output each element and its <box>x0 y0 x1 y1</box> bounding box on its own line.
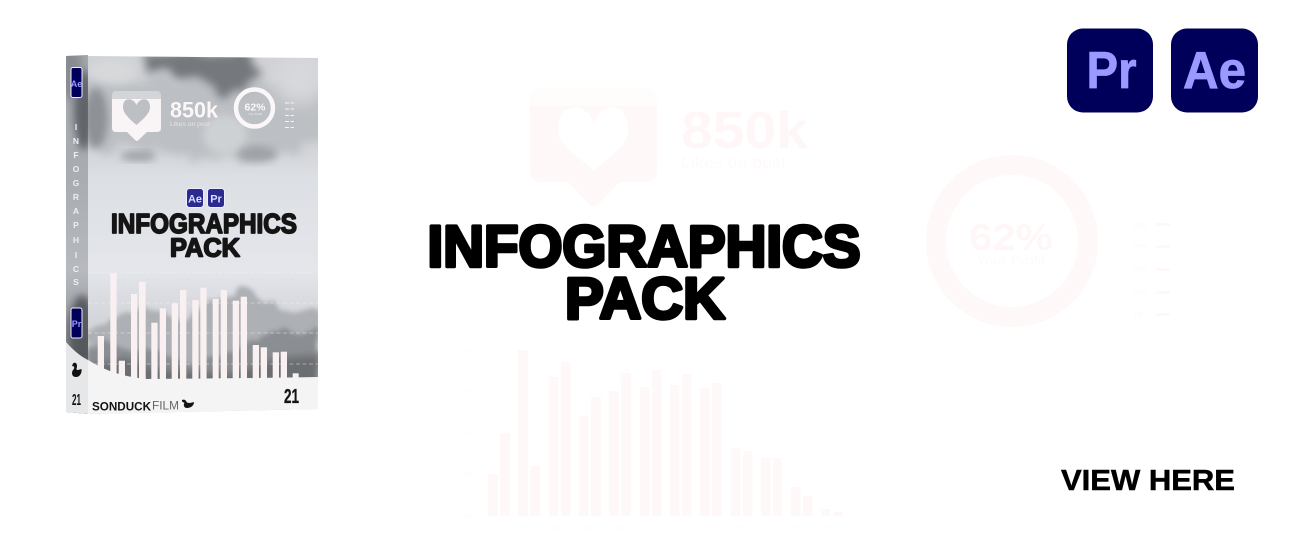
850k stat: 850k <box>170 98 219 122</box>
background: ghost bar chart: 0% <box>462 513 472 520</box>
profit ring <box>236 90 273 126</box>
background: ghost bar chart: Apr <box>583 525 594 532</box>
background: ghost 850k stat: Likes on post <box>681 153 786 172</box>
background: ghost bar chart: Jun <box>642 525 654 532</box>
background: ghost 850k stat: 850k <box>681 102 808 160</box>
background: ghost bar chart: Nov <box>794 525 807 532</box>
icon: Premiere Pro <box>1067 28 1153 112</box>
profit ring: 62% <box>244 102 266 114</box>
mountains far <box>88 284 318 366</box>
icon: After Effects: Ae <box>1183 42 1246 100</box>
background: ghost bar chart: Dec <box>824 525 837 532</box>
background: ghost legend: 20% <box>1133 244 1147 251</box>
icon: After Effects <box>1171 28 1258 112</box>
spine Ae badge <box>71 68 82 98</box>
Ae and Pr badges: Pr <box>210 194 223 206</box>
main title <box>428 214 860 332</box>
product box <box>66 55 318 414</box>
white footer band <box>88 360 318 414</box>
background: ghost bar chart: Feb <box>521 525 533 532</box>
background: ghost bar chart: Mar <box>552 525 565 532</box>
brand logo <box>92 398 194 414</box>
spine number: 21 <box>72 392 81 409</box>
background: ghost profit ring <box>936 165 1088 317</box>
850k stat: Likes on post <box>170 121 210 128</box>
smoke and mountain photo <box>88 56 318 379</box>
background: ghost bar chart: Sep <box>733 525 745 532</box>
spine Pr badge: Pr <box>72 319 82 329</box>
spine Pr badge <box>71 308 82 338</box>
Ae and Pr badges: Ae <box>188 194 202 206</box>
background: ghost bar chart: Jan <box>491 525 503 532</box>
main title: PACK <box>565 266 725 332</box>
box title: PACK <box>170 232 240 262</box>
background: ghost profit ring: Your Profit <box>976 252 1046 268</box>
box bar chart <box>98 273 299 381</box>
background: ghost bar chart: 100% <box>458 348 476 355</box>
dark smoke patch <box>145 50 258 96</box>
box title: INFOGRAPHICS <box>111 208 297 239</box>
spine Ae badge: Ae <box>71 79 82 89</box>
like bubble <box>112 91 161 141</box>
dashed grid lines <box>88 273 318 364</box>
main title: INFOGRAPHICS <box>428 214 860 280</box>
background: ghost bar chart: 75% <box>459 389 473 396</box>
background: ghost legend: 20% <box>1133 267 1147 274</box>
box spine <box>66 55 88 414</box>
background: ghost bar chart: Jul <box>675 525 684 532</box>
mini legend <box>285 103 294 128</box>
profit ring: Your Profit <box>248 112 262 116</box>
background: ghost profit ring: 62% <box>969 217 1053 258</box>
Ae and Pr badges <box>186 188 224 208</box>
box front cover <box>88 56 318 414</box>
box number: 21 <box>284 386 299 408</box>
brand logo: SONDUCK <box>92 400 151 414</box>
background: ghost legend: 1% <box>1133 312 1143 319</box>
call to action: VIEW HERE <box>1061 465 1235 497</box>
box title <box>111 208 297 262</box>
spine title: INFOGRAPHICS <box>73 122 80 287</box>
background: ghost bar chart: Aug <box>703 525 715 532</box>
background: ghost bar chart: 25% <box>459 472 473 479</box>
background: ghost legend: 30% <box>1133 222 1147 229</box>
background: ghost like bubble <box>530 88 657 206</box>
icon: Premiere Pro: Pr <box>1086 42 1136 100</box>
mountains near <box>88 326 318 376</box>
spine duck icon <box>72 363 82 377</box>
background: ghost bar chart: May <box>611 525 625 532</box>
background: ghost bar chart: 50% <box>459 430 473 437</box>
smoke band <box>88 73 318 164</box>
background: ghost legend <box>1133 222 1170 319</box>
brand logo: FILM <box>152 398 179 412</box>
background: ghost legend: 20% <box>1133 290 1147 297</box>
background: ghost bar chart <box>458 348 843 532</box>
background: ghost bar chart: Oct <box>764 525 774 532</box>
